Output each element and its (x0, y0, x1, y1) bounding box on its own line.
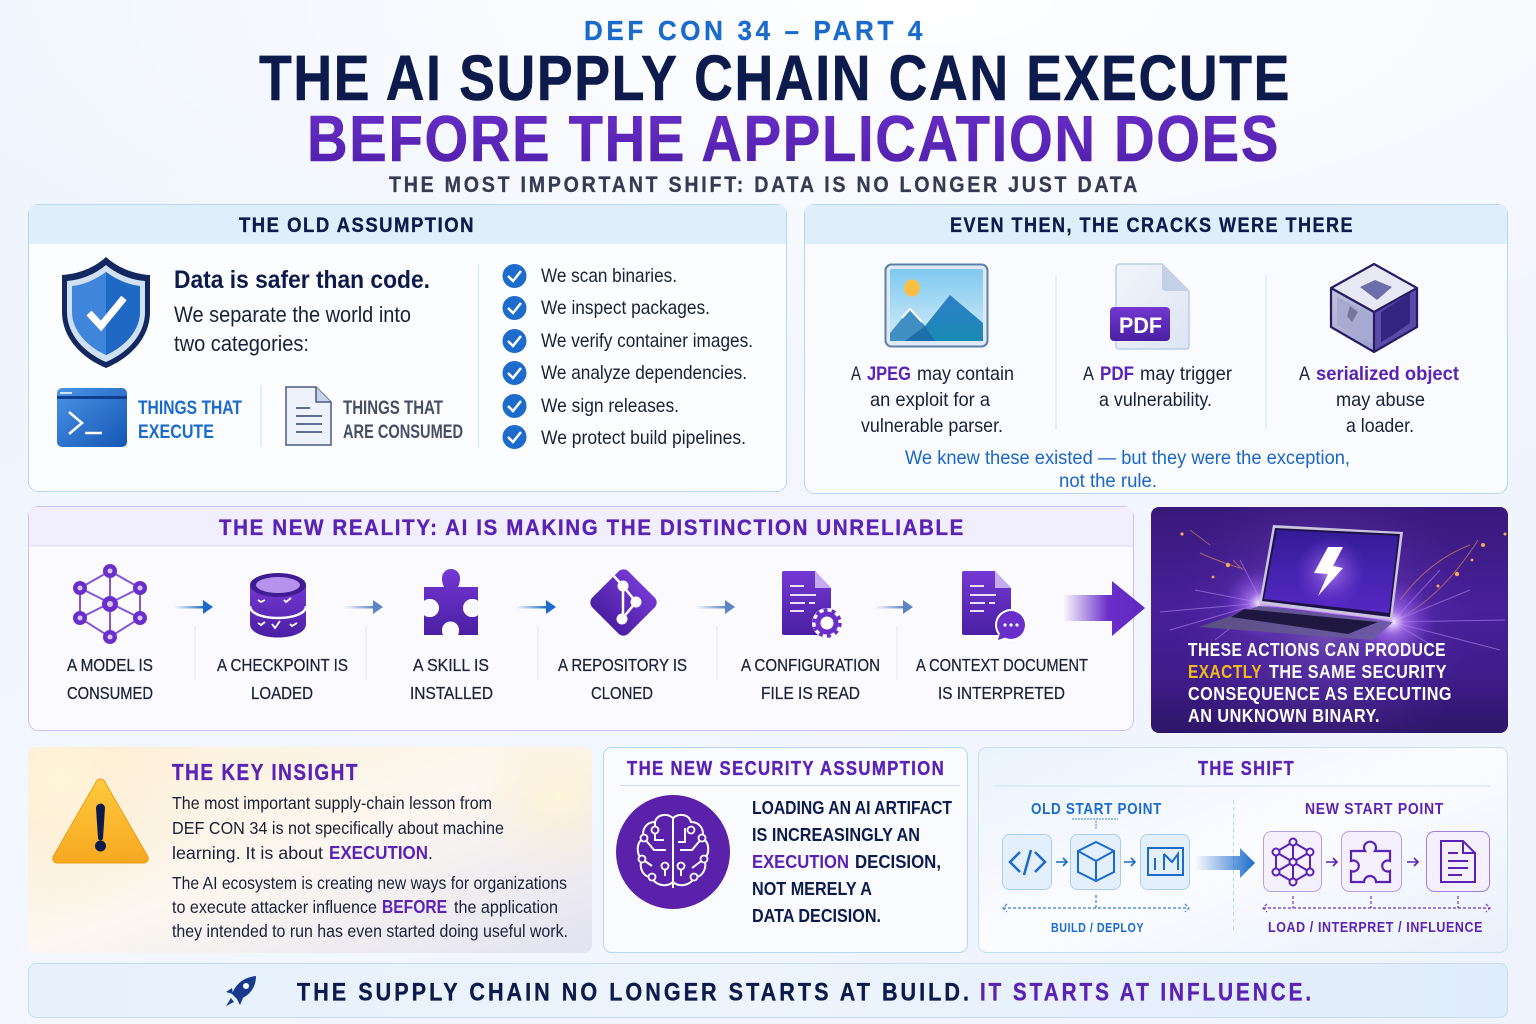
panel: key insight (28, 747, 592, 953)
icon: serialized object cube (1331, 264, 1417, 352)
consequence text: THE SAME SECURITY (1269, 662, 1447, 682)
rays and sparks (1160, 530, 1506, 650)
label (217, 655, 348, 703)
things that are consumed: ARE CONSUMED (343, 422, 463, 443)
key claim: Data is safer than code. (174, 266, 430, 294)
assumption statement: LOADING AN AI ARTIFACT (752, 797, 953, 818)
checklist: We verify container images. (541, 330, 753, 352)
panel: the new reality (28, 506, 1134, 730)
icon: context doc with chat bubble (962, 571, 1027, 641)
label (741, 655, 880, 703)
arrow (174, 600, 213, 614)
things that are consumed: THINGS THAT (343, 398, 443, 419)
checklist: We scan binaries. (541, 265, 677, 287)
paragraph 1: . (428, 843, 433, 863)
subtitle: THE MOST IMPORTANT SHIFT: DATA IS NO LONGER JUST DATA (389, 172, 1140, 197)
banner text: THE SUPPLY CHAIN NO LONGER STARTS AT BUILD. (297, 978, 972, 1006)
paragraph 2: to execute attacker influence (172, 897, 377, 917)
label: INSTALLED (410, 683, 493, 703)
assumption statement: EXECUTION (752, 851, 849, 872)
paragraph 2: they intended to run has even started doing useful work. (172, 921, 568, 941)
caption: JPEG: JPEG (867, 363, 911, 385)
consequence text: AN UNKNOWN BINARY. (1188, 706, 1380, 726)
consequence text: THESE ACTIONS CAN PRODUCE (1188, 640, 1446, 660)
range: build / deploy: BUILD / DEPLOY (1051, 921, 1144, 935)
icon: document (286, 387, 331, 445)
conclusion note (905, 447, 1350, 492)
consequence text (1188, 640, 1452, 726)
label: LOADED (251, 683, 313, 703)
caption: serialized object: may abuse (1336, 389, 1425, 411)
checklist: We sign releases. (541, 395, 679, 417)
icon: config doc with gear (782, 571, 842, 638)
paragraph 1 (172, 793, 504, 863)
consequence text: EXACTLY (1188, 662, 1262, 682)
caption: PDF: may trigger (1140, 363, 1232, 385)
checklist: We analyze dependencies. (541, 362, 747, 384)
caption: PDF: PDF (1100, 363, 1134, 385)
checklist (502, 264, 753, 449)
checklist: We protect build pipelines. (541, 427, 746, 449)
package box (1070, 834, 1120, 890)
caption: PDF (1083, 363, 1232, 411)
things that are consumed (343, 398, 463, 443)
label (558, 655, 687, 703)
consequence text: CONSEQUENCE AS EXECUTING (1188, 684, 1452, 704)
caption: PDF: a vulnerability. (1099, 389, 1212, 411)
arrow (875, 600, 913, 614)
code box (1002, 834, 1052, 890)
icon: database (250, 573, 306, 638)
step 5: configuration file read (741, 571, 880, 703)
caption: JPEG (851, 363, 1014, 437)
assumption statement: DECISION, (855, 851, 941, 872)
step 3: skill installed (410, 569, 493, 703)
label (410, 655, 493, 703)
icon: warning triangle (53, 779, 148, 863)
paragraph 1: EXECUTION (329, 842, 428, 863)
old start point (1002, 801, 1190, 935)
panel: the old assumption (28, 204, 786, 492)
icon: PDF file (1110, 264, 1189, 349)
caption: JPEG: an exploit for a (870, 389, 990, 411)
things that execute: THINGS THAT (138, 398, 242, 419)
arrow (344, 600, 383, 614)
eyebrow: DEF CON 34 part 4: DEF CON 34 – PART 4 (584, 15, 926, 46)
caption: JPEG: vulnerable parser. (861, 415, 1003, 437)
big arrow (1063, 581, 1145, 636)
bottom banner (28, 964, 1508, 1018)
things that execute (138, 398, 242, 443)
checklist: We inspect packages. (541, 297, 710, 319)
label: FILE IS READ (761, 683, 860, 703)
puzzle box (1342, 832, 1402, 892)
title line 1: THE AI SUPPLY CHAIN CAN EXECUTE (259, 42, 1291, 114)
assumption statement: NOT MERELY A (752, 878, 872, 899)
label: new start point: NEW START POINT (1305, 801, 1444, 818)
heading: key insight: THE KEY INSIGHT (172, 759, 359, 785)
icon: neural network (73, 564, 147, 644)
caption: JPEG: may contain (917, 363, 1014, 385)
label (67, 655, 153, 703)
assumption statement (752, 797, 953, 926)
label: A REPOSITORY IS (558, 655, 687, 675)
paragraph 1: DEF CON 34 is not specifically about machine (172, 818, 504, 838)
title line 2: BEFORE THE APPLICATION DOES (307, 102, 1280, 175)
icon: image file (886, 264, 988, 346)
range: build / deploy (1003, 895, 1189, 935)
caption: serialized object: A (1299, 363, 1310, 385)
paragraph 2: BEFORE (382, 896, 447, 917)
arrow (1407, 858, 1418, 866)
things that execute: EXECUTE (138, 422, 214, 443)
heading: the old assumption: THE OLD ASSUMPTION (239, 214, 475, 237)
icon: laptop with lightning (1199, 525, 1403, 640)
heading: new reality: THE NEW REALITY: AI IS MAKING THE DISTINCTION UNRELIABLE (219, 515, 965, 540)
paragraph 2 (172, 873, 568, 941)
icon: AI brain (616, 795, 730, 909)
label: A CONFIGURATION (741, 655, 880, 675)
conclusion note: We knew these existed — but they were the exception, (905, 447, 1350, 469)
caption: JPEG: A (851, 363, 861, 385)
deploy box (1140, 834, 1190, 890)
paragraph 2: the application (454, 897, 558, 917)
new start point (1263, 801, 1490, 936)
step 1: model consumed (67, 564, 153, 703)
assumption statement: DATA DECISION. (752, 905, 881, 926)
label: old start point: OLD START POINT (1031, 801, 1162, 818)
paragraph 1: learning. It is about (172, 843, 323, 863)
label: A CONTEXT DOCUMENT (916, 655, 1088, 675)
assumption statement: IS INCREASINGLY AN (752, 824, 920, 845)
icon: git diamond (587, 566, 660, 639)
caption: PDF: A (1083, 363, 1094, 385)
label: CONSUMED (67, 683, 153, 703)
arrow (1124, 858, 1135, 866)
panel: consequence with laptop (1151, 507, 1508, 733)
conclusion note: not the rule. (1059, 470, 1157, 492)
label (916, 655, 1088, 703)
icon: shield (62, 257, 150, 368)
label: A SKILL IS (413, 655, 489, 675)
heading: the shift: THE SHIFT (1198, 758, 1295, 780)
label: A CHECKPOINT IS (217, 655, 348, 675)
range: load / interpret / influence: LOAD / INTERPRET / INFLUENCE (1268, 920, 1483, 936)
label: IS INTERPRETED (938, 683, 1065, 703)
step 6: context document interpreted (916, 571, 1088, 703)
transition arrow (1195, 848, 1255, 878)
panel: the shift (978, 748, 1508, 952)
paragraph 1: The most important supply-chain lesson from (172, 793, 492, 813)
icon: rocket (226, 976, 256, 1006)
paragraph 2: The AI ecosystem is creating new ways for organizations (172, 873, 567, 893)
icon: puzzle piece (424, 569, 478, 635)
document box (1426, 832, 1490, 892)
range: load / interpret / influence (1263, 896, 1490, 936)
caption: serialized object (1299, 363, 1459, 437)
step 2: checkpoint loaded (217, 573, 348, 703)
heading: cracks: EVEN THEN, THE CRACKS WERE THERE (950, 214, 1354, 237)
arrow (695, 600, 735, 614)
caption: serialized object: serialized object (1316, 363, 1459, 385)
intro text (174, 302, 411, 356)
label: A MODEL IS (67, 655, 153, 675)
icon: PDF file: PDF (1119, 313, 1162, 338)
intro text: We separate the world into (174, 302, 411, 327)
panel: the new security assumption (604, 748, 968, 952)
intro text: two categories: (174, 331, 309, 356)
arrow (1056, 858, 1067, 866)
arrow (516, 600, 556, 614)
arrow (1326, 858, 1337, 866)
label: CLONED (591, 683, 653, 703)
icon: terminal (57, 388, 127, 447)
panel: even then, the cracks were there (804, 204, 1508, 494)
heading: security assumption: THE NEW SECURITY ASSUMPTION (627, 758, 945, 780)
model box (1264, 832, 1322, 892)
caption: serialized object: a loader. (1346, 415, 1414, 437)
step 4: repository cloned (558, 566, 687, 703)
banner text: IT STARTS AT INFLUENCE. (980, 978, 1314, 1006)
